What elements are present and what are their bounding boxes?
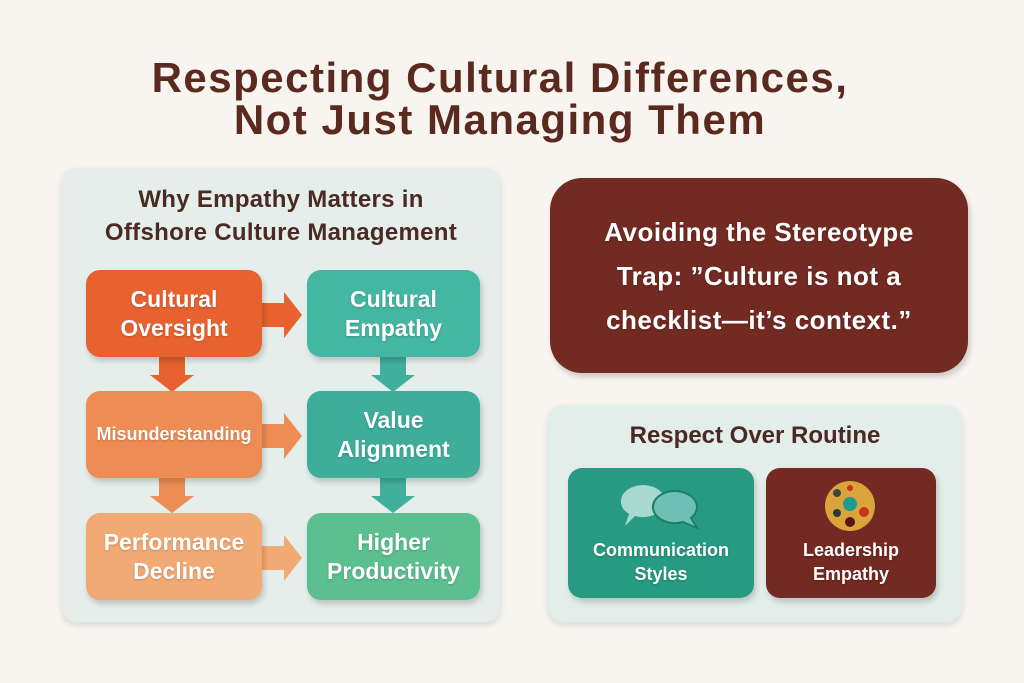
panel heading: Respect Over Routine [630,422,880,449]
panel: respect over routine [548,405,962,622]
box: cultural empathy: Empathy [345,314,442,340]
box: cultural oversight: Oversight [120,314,228,340]
card: leadership empathy [766,468,936,598]
card: communication styles [568,468,754,598]
card: leadership empathy: Leadership [803,540,899,560]
box: value alignment: Alignment [337,436,450,462]
card: leadership empathy: Empathy [813,564,889,584]
card: communication styles: Communication [593,540,729,560]
panel: why empathy matters [62,168,500,622]
box: higher productivity: Higher [357,528,430,554]
box: higher productivity: Productivity [327,558,460,584]
title [152,54,848,143]
title: Not Just Managing Them [234,96,766,143]
box: performance decline: Performance [104,528,244,554]
box: misunderstanding: Misunderstanding [96,424,252,444]
icon: palette [825,481,875,531]
card: communication styles: Styles [634,564,688,584]
box: value alignment: Value [363,406,424,432]
box: performance decline: Decline [133,558,215,584]
icon: speech bubbles [620,485,700,530]
box: cultural oversight [86,270,262,357]
box: misunderstanding [86,391,262,478]
box: cultural empathy [307,270,480,357]
box: value alignment [307,391,480,478]
panel heading: Offshore Culture Management [105,219,457,246]
callout: stereotype trap: Trap: ”Culture is not a [617,260,901,290]
flow diagram [150,292,415,581]
callout: stereotype trap [550,178,968,373]
panel heading [105,186,457,246]
callout: stereotype trap: checklist—it’s context.” [606,304,912,334]
callout: stereotype trap: Avoiding the Stereotype [604,216,914,246]
box: cultural empathy: Cultural [350,286,437,312]
panel heading: Why Empathy Matters in [138,186,424,213]
box: performance decline [86,513,262,600]
title: Respecting Cultural Differences, [152,54,848,101]
box: cultural oversight: Cultural [131,286,217,312]
box: higher productivity [307,513,480,600]
